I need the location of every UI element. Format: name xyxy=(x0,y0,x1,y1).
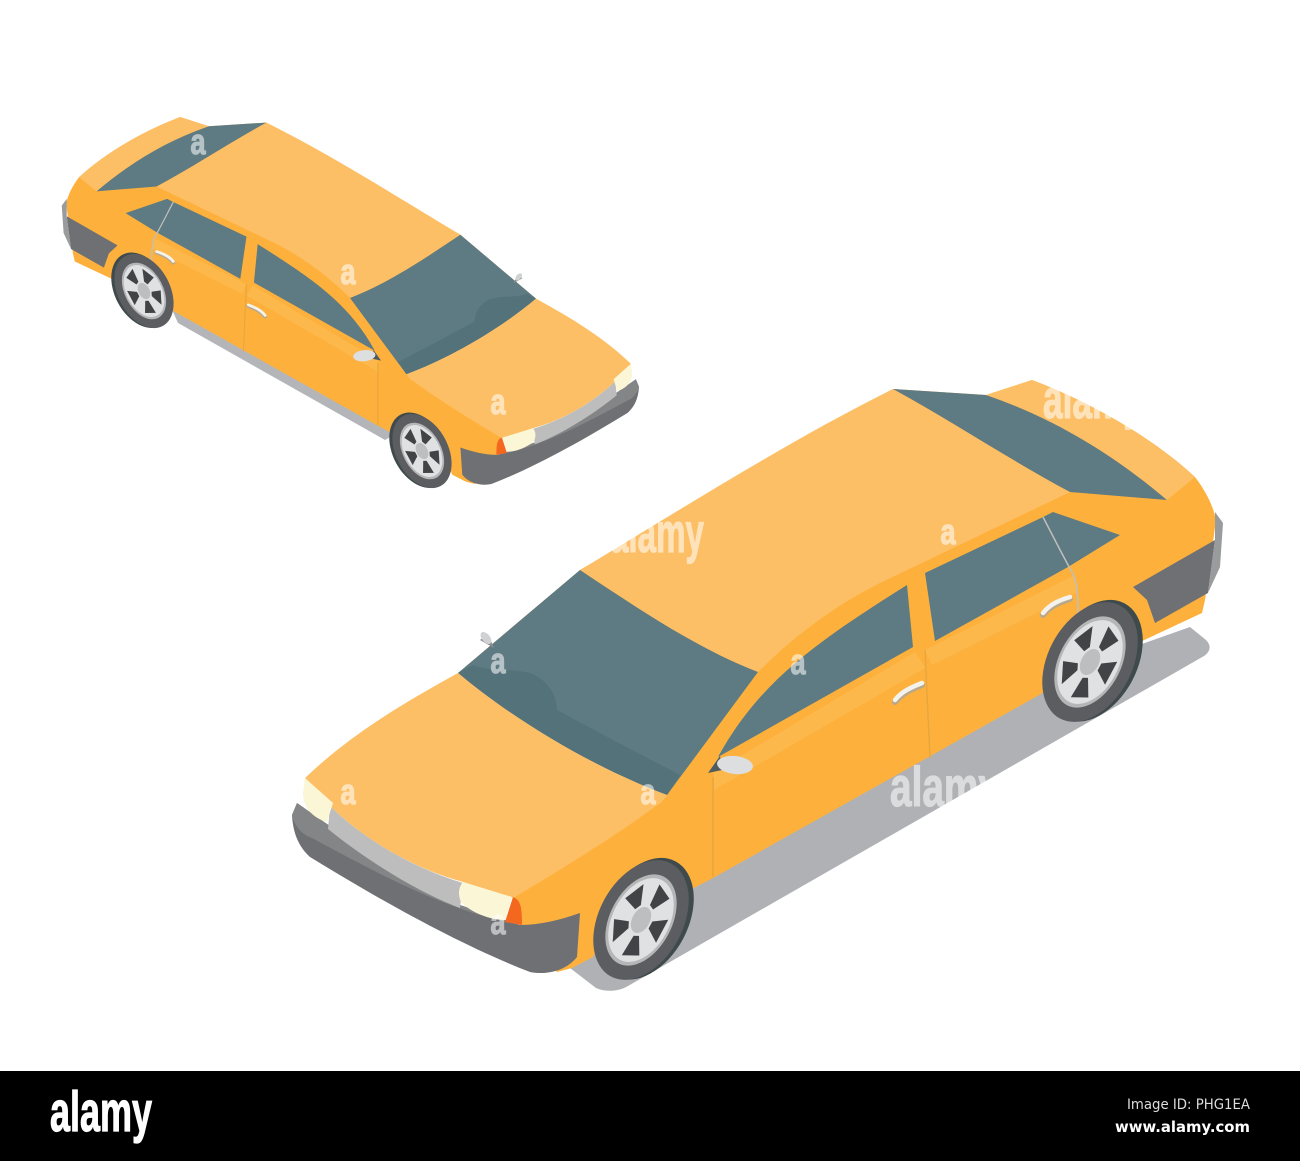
small car rear wheel xyxy=(99,242,186,338)
small car indicator xyxy=(496,438,507,455)
large car mirror xyxy=(708,754,754,776)
small car rear window xyxy=(96,123,266,191)
large car ground shadow xyxy=(570,627,1210,991)
watermarks: alamy xyxy=(890,755,1000,818)
large car left headlight xyxy=(303,778,333,822)
large car bumper xyxy=(292,803,580,973)
footer logo: alamy xyxy=(50,1080,152,1144)
watermarks: a xyxy=(640,771,656,812)
large car rear wheel xyxy=(1023,583,1163,738)
large car front side window xyxy=(718,585,913,757)
small car bumper highlight xyxy=(498,379,639,455)
small car far mirror xyxy=(514,272,523,283)
small car handles xyxy=(157,252,265,317)
watermarks: a xyxy=(340,771,356,812)
watermarks: a xyxy=(790,641,806,682)
large car body xyxy=(458,380,1216,972)
large car roof xyxy=(580,389,1070,672)
large car door lines xyxy=(713,650,930,877)
footer image id: Image ID: PHG1EA xyxy=(1127,1097,1250,1113)
small car front door strip xyxy=(246,286,377,371)
small car rear door line xyxy=(152,202,173,262)
watermarks: a xyxy=(490,901,506,942)
large car rear bumper side xyxy=(1208,512,1223,593)
small car bumper xyxy=(460,379,639,485)
large car rear side window xyxy=(925,512,1120,641)
large car rear window xyxy=(893,389,1167,500)
large car windshield shade xyxy=(458,665,680,795)
watermarks: a xyxy=(340,251,356,292)
large car trunk xyxy=(986,380,1195,500)
watermarks: alamy xyxy=(610,501,704,564)
large car far mirror xyxy=(478,630,494,648)
large car front door strip xyxy=(714,652,925,790)
small car door lines xyxy=(243,284,378,425)
small car windshield shade xyxy=(398,294,536,374)
small car roof xyxy=(157,123,460,298)
watermarks: a xyxy=(490,640,506,681)
large car bumper highlight xyxy=(292,803,520,925)
small car: ground strip xyxy=(170,305,392,440)
large car door strip xyxy=(925,575,1078,665)
large car grille xyxy=(328,806,463,908)
small car rear side window xyxy=(126,199,246,279)
large car hood xyxy=(305,673,667,898)
footer bar xyxy=(0,1071,1300,1161)
watermarks: a xyxy=(490,381,506,422)
small car body xyxy=(66,117,536,484)
large car rear bumper xyxy=(1133,540,1215,623)
large car windshield xyxy=(458,570,758,795)
large car right headlight xyxy=(459,882,512,920)
large car handles xyxy=(895,597,1070,702)
watermarks: a xyxy=(940,511,956,552)
small car front side window xyxy=(254,244,375,351)
small car hood xyxy=(406,299,631,438)
small car rear bumper side xyxy=(62,199,71,249)
small car right headlight xyxy=(503,428,535,452)
small car trunk xyxy=(79,117,209,191)
small car left headlight xyxy=(614,364,632,391)
large car xyxy=(292,380,1223,973)
large car rear door line xyxy=(1043,517,1078,614)
small car rear bumper xyxy=(67,216,118,268)
large car front wheel xyxy=(574,841,714,996)
small car door strip xyxy=(152,238,246,294)
small car grille xyxy=(533,381,617,444)
watermarks xyxy=(190,121,1143,942)
watermarks: alamy xyxy=(1043,367,1143,430)
small car xyxy=(62,117,639,485)
small car windshield xyxy=(350,235,536,374)
footer url: www.alamy.com xyxy=(1115,1118,1250,1136)
small car mirror xyxy=(353,349,381,362)
watermarks: a xyxy=(190,121,206,162)
small car front wheel xyxy=(377,402,464,498)
large car indicator xyxy=(505,897,522,925)
